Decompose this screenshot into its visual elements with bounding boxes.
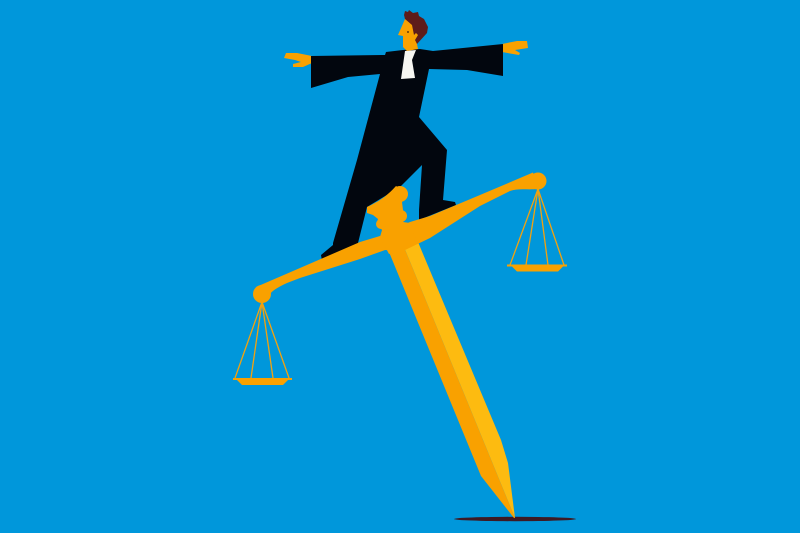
hilt knob lower (376, 219, 386, 229)
left beam end (253, 285, 271, 303)
blade shaded side (389, 247, 515, 518)
left scale pan (233, 302, 292, 385)
judge figure (284, 10, 528, 261)
blade light side (404, 242, 515, 518)
hole in the ground (454, 517, 576, 521)
hilt collar (367, 186, 417, 254)
eye (407, 31, 409, 33)
neck and face (398, 19, 420, 51)
hilt knob middle (395, 210, 407, 222)
icon: right hand (502, 41, 528, 55)
white jabot (401, 50, 416, 79)
right pan strings (510, 189, 564, 265)
sword blade forming the scale post (389, 242, 515, 518)
scale beam and hilt (253, 172, 546, 303)
beam (256, 172, 538, 303)
left pan dish (233, 378, 292, 385)
hair (404, 10, 428, 44)
left pan strings (235, 302, 289, 378)
right scale pan (507, 189, 567, 272)
right beam end (530, 172, 546, 190)
black robe with sleeves and legs (311, 44, 503, 261)
hilt knob top (392, 186, 408, 202)
icon: left hand (284, 53, 312, 67)
right pan dish (507, 264, 567, 272)
